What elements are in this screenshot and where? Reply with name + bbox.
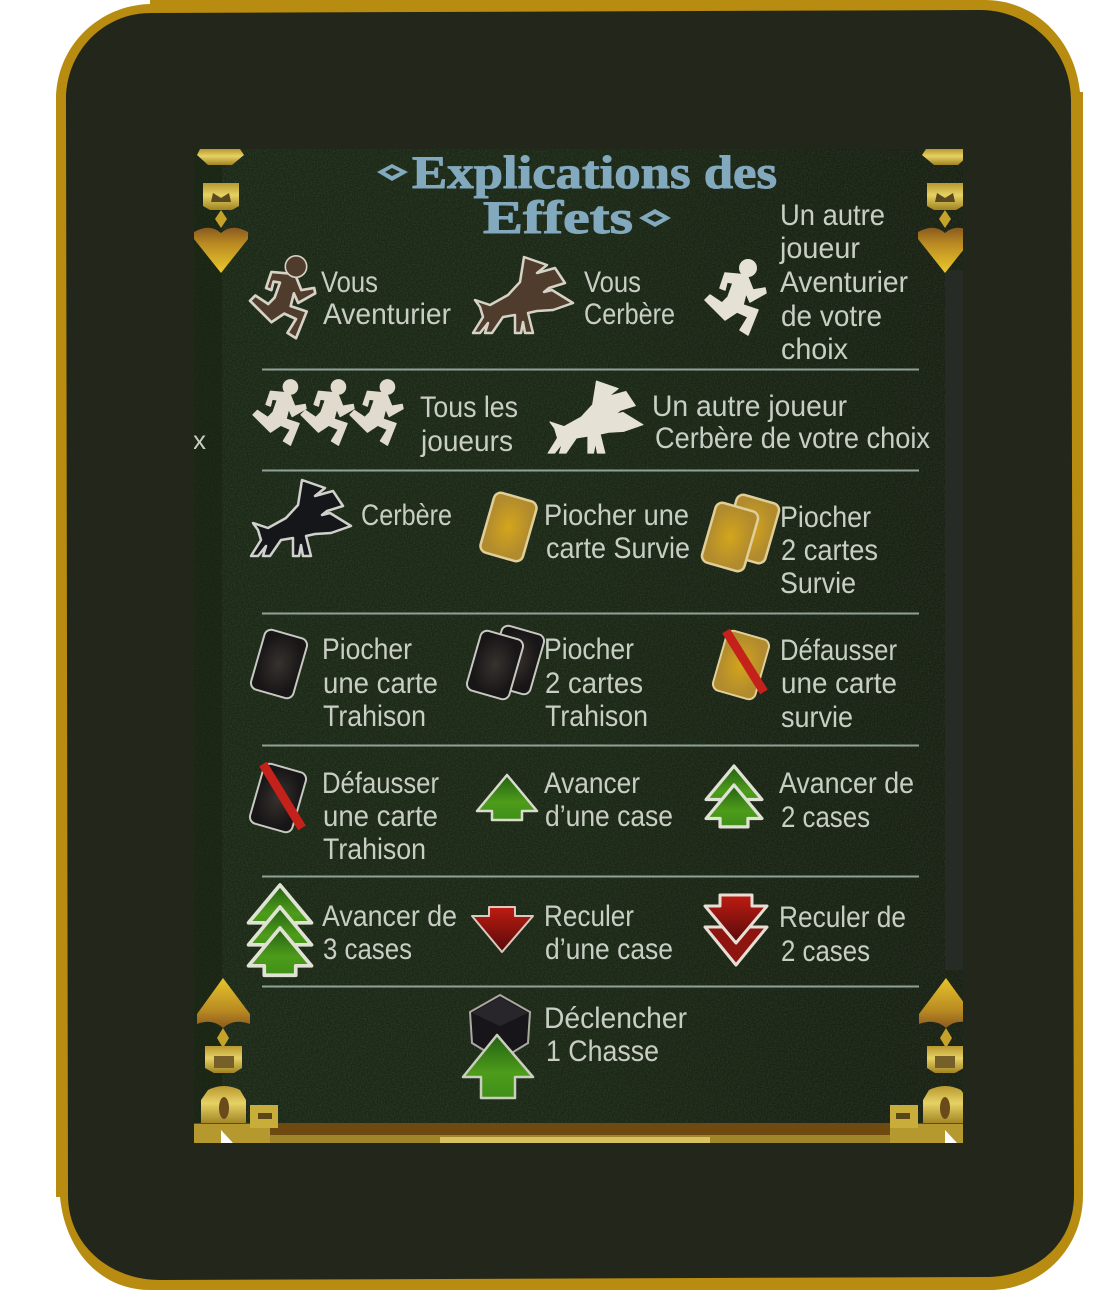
icon: discard betrayal card [248, 762, 308, 834]
ornament: bottom left [197, 978, 250, 1124]
text: Avancer de 2 cases: Avancer de [779, 767, 914, 800]
text: Vous Aventurier: Aventurier [323, 298, 451, 331]
text: Piocher une carte Trahison: Piocher [322, 633, 412, 666]
text: Un autre joueur Aventurier: choix [781, 333, 848, 366]
text: Avancer de 3 cases: 3 cases [323, 933, 412, 966]
ornament: top left [194, 149, 248, 273]
text: Avancer d'une case [544, 772, 672, 826]
icon: betrayal card [249, 628, 309, 700]
text: Un autre joueur Cerbere: Cerbère de votre choix [655, 422, 930, 455]
text: Avancer d'une case: d’une case [545, 800, 673, 833]
text: Piocher 2 cartes Trahison: Piocher [544, 633, 634, 666]
text: Tous les joueurs: Tous les [420, 391, 518, 424]
text: Defausser une carte Trahison: Défausser [322, 767, 439, 800]
text: Un autre joueur Cerbere: Un autre joueur [652, 390, 847, 423]
icon: two betrayal cards [465, 624, 546, 701]
text: Piocher une carte Survie: carte Survie [546, 532, 690, 565]
text: Un autre joueur Aventurier: de votre [781, 300, 882, 333]
text: Un autre joueur Aventurier: joueur [779, 232, 860, 265]
icon: survival card [479, 491, 538, 563]
text: Reculer d'une case: d’une case [545, 933, 673, 966]
icon: discard survival card [711, 629, 771, 701]
text: Un autre joueur Aventurier: Un autre [780, 199, 885, 232]
text: Piocher une carte Trahison [324, 638, 437, 726]
text: Defausser une carte Trahison: Trahison [323, 833, 426, 866]
ornament: top right [918, 149, 963, 273]
text: Vous Aventurier: Vous [321, 266, 378, 299]
icon: two green arrows [706, 766, 762, 827]
text: Un autre joueur Cerbere [654, 394, 930, 448]
text: Piocher 2 cartes Survie: 2 cartes [781, 534, 878, 567]
stray letter x: x [193, 425, 206, 455]
text: Avancer de 2 cases: 2 cases [781, 801, 870, 834]
text: Defausser une carte survie [782, 638, 897, 728]
text: Piocher 2 cartes Trahison: 2 cartes [545, 667, 643, 700]
text: Defausser une carte survie: survie [781, 701, 853, 734]
text: Reculer de 2 cases: Reculer de [779, 901, 906, 934]
icon: brown cerberus [473, 257, 573, 333]
icon: three green arrows [248, 885, 312, 975]
icon: three white runners [253, 379, 403, 445]
text: Piocher 2 cartes Survie: Survie [780, 567, 856, 600]
text: Avancer de 3 cases [322, 900, 457, 966]
text: Cerbere: Cerbère [361, 499, 452, 532]
text: Tous les joueurs: joueurs [420, 425, 513, 458]
icon: two red arrows [705, 895, 767, 965]
dividers [262, 370, 919, 986]
text: Declencher 1 Chasse: Déclencher [544, 1002, 687, 1035]
text: Reculer d'une case [544, 900, 673, 966]
text: Vous Aventurier [321, 272, 451, 324]
text: Declencher 1 Chasse: 1 Chasse [546, 1035, 659, 1068]
text: Tous les joueurs [420, 391, 518, 458]
heading line 2: Effets [483, 192, 633, 244]
ornament: bottom border [194, 1105, 963, 1143]
icon: white runner [705, 259, 766, 335]
text: Reculer d'une case: Reculer [544, 900, 634, 933]
icon: white cerberus [548, 381, 643, 453]
text: Piocher 2 cartes Survie: Piocher [780, 501, 871, 534]
text: Avancer de 3 cases: Avancer de [322, 900, 457, 933]
text: Piocher une carte Survie: Piocher une [544, 499, 689, 532]
icon: one red arrow [472, 907, 533, 952]
text: Reculer de 2 cases: 2 cases [781, 935, 870, 968]
title [377, 155, 776, 234]
text: Piocher une carte Trahison: Trahison [323, 700, 426, 733]
text: Piocher une carte Survie [546, 504, 689, 558]
text: Reculer de 2 cases [779, 901, 906, 968]
text: Defausser une carte survie: Défausser [780, 634, 897, 667]
text: Defausser une carte Trahison: une carte [323, 800, 438, 833]
icon: brown runner [250, 256, 315, 338]
text: Defausser une carte survie: une carte [781, 667, 897, 700]
text: Piocher 2 cartes Trahison [546, 638, 646, 726]
text: Piocher une carte Trahison: une carte [323, 667, 438, 700]
icon: one green arrow [477, 775, 537, 820]
heading line 1: Explications des [412, 147, 777, 199]
icon: right diamond [639, 209, 671, 227]
text: Avancer de 2 cases [779, 767, 914, 834]
text: Un autre joueur Aventurier: Aventurier [780, 266, 908, 299]
text: Piocher 2 cartes Trahison: Trahison [545, 700, 648, 733]
ornament: bottom right [919, 978, 963, 1123]
icon: left diamond [377, 164, 408, 181]
text: Vous Cerbere [584, 272, 674, 324]
icon: two survival cards [700, 493, 781, 573]
text: Declencher 1 Chasse [544, 1002, 687, 1068]
panel: effects card [193, 147, 972, 1143]
text: Vous Cerbere: Cerbère [584, 298, 675, 331]
text: Piocher 2 cartes Survie [781, 506, 877, 594]
text: Avancer d'une case: Avancer [544, 767, 640, 800]
text: Defausser une carte Trahison [324, 771, 439, 860]
icon: hunt cube with arrow [463, 995, 533, 1098]
icon: black cerberus [251, 480, 351, 556]
text: Un autre joueur Aventurier [779, 199, 908, 366]
text: Vous Cerbere: Vous [584, 266, 641, 299]
